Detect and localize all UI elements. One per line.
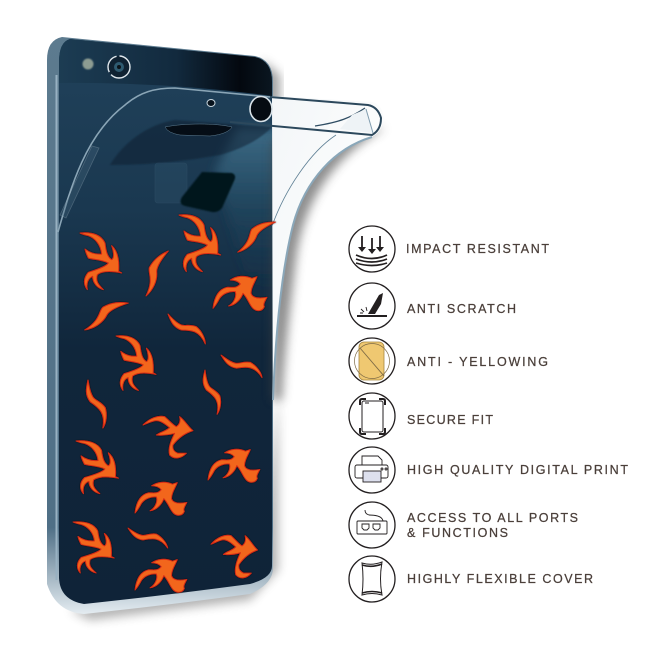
flame 13 (76, 441, 118, 494)
flame 6 (85, 291, 128, 342)
flame 19 (135, 559, 187, 592)
fingerprint bump outline (155, 163, 187, 203)
feature: anti yellowing (349, 338, 548, 384)
flange shadow (272, 128, 385, 400)
top glass band (59, 39, 272, 96)
fingerprint window (181, 172, 235, 212)
icon: secure fit (349, 393, 395, 439)
feature: ports (349, 502, 578, 548)
flame 2 (179, 215, 221, 272)
flame 15 (135, 482, 187, 515)
flame 12 (143, 416, 193, 458)
flange body (272, 96, 384, 400)
feature: flexible cover (349, 556, 593, 602)
label: HIGH QUALITY DIGITAL PRINT (407, 463, 628, 477)
top shadow (262, 60, 280, 110)
flame 17 (128, 521, 168, 555)
top band (230, 97, 381, 135)
label: ANTI SCRATCH (407, 302, 516, 316)
label: & FUNCTIONS (407, 526, 508, 540)
label (407, 511, 578, 540)
flame 16 (73, 522, 114, 573)
case side button (60, 146, 99, 218)
flame 1 (80, 233, 122, 290)
icon: ports (349, 502, 395, 548)
phone shadow (70, 390, 278, 620)
flange outer edge (273, 137, 372, 400)
case cut-out (165, 124, 232, 136)
camera opening (250, 96, 272, 122)
icon: yellowing (349, 338, 395, 384)
phone with clear case (47, 37, 285, 614)
flame 3 (146, 251, 168, 296)
flange inner line (272, 135, 336, 226)
feature: anti scratch (349, 283, 516, 329)
feature: impact resistant (349, 226, 549, 272)
feature: secure fit (349, 393, 493, 439)
label: IMPACT RESISTANT (406, 242, 549, 256)
label: SECURE FIT (407, 413, 493, 427)
icon: scratch (349, 283, 395, 329)
label: HIGHLY FLEXIBLE COVER (407, 572, 593, 586)
lighter reflection (214, 124, 272, 232)
flame 10 (188, 370, 234, 414)
flash (82, 58, 94, 70)
speaker hole (207, 100, 215, 106)
clear case flange (207, 96, 385, 400)
feature: digital print (349, 447, 628, 493)
flame 5 (213, 276, 267, 311)
icon: printer (349, 447, 395, 493)
case rim (47, 37, 273, 614)
case shadow under top (110, 120, 272, 165)
icon: impact (349, 226, 395, 272)
left case outline (58, 88, 270, 232)
left edge highlight (56, 75, 58, 580)
flame 18 (211, 535, 258, 578)
flame 7 (168, 314, 205, 344)
camera (108, 56, 130, 78)
flame 8 (116, 336, 156, 390)
flame 9 (221, 349, 262, 384)
flame 14 (208, 449, 260, 482)
icon: flexible cover (349, 556, 395, 602)
flame 4 (238, 213, 275, 261)
phone back (59, 39, 272, 604)
flame 11 (70, 380, 120, 428)
flame pattern (70, 213, 275, 592)
label: ANTI - YELLOWING (407, 355, 548, 369)
label: ACCESS TO ALL PORTS (407, 511, 578, 525)
